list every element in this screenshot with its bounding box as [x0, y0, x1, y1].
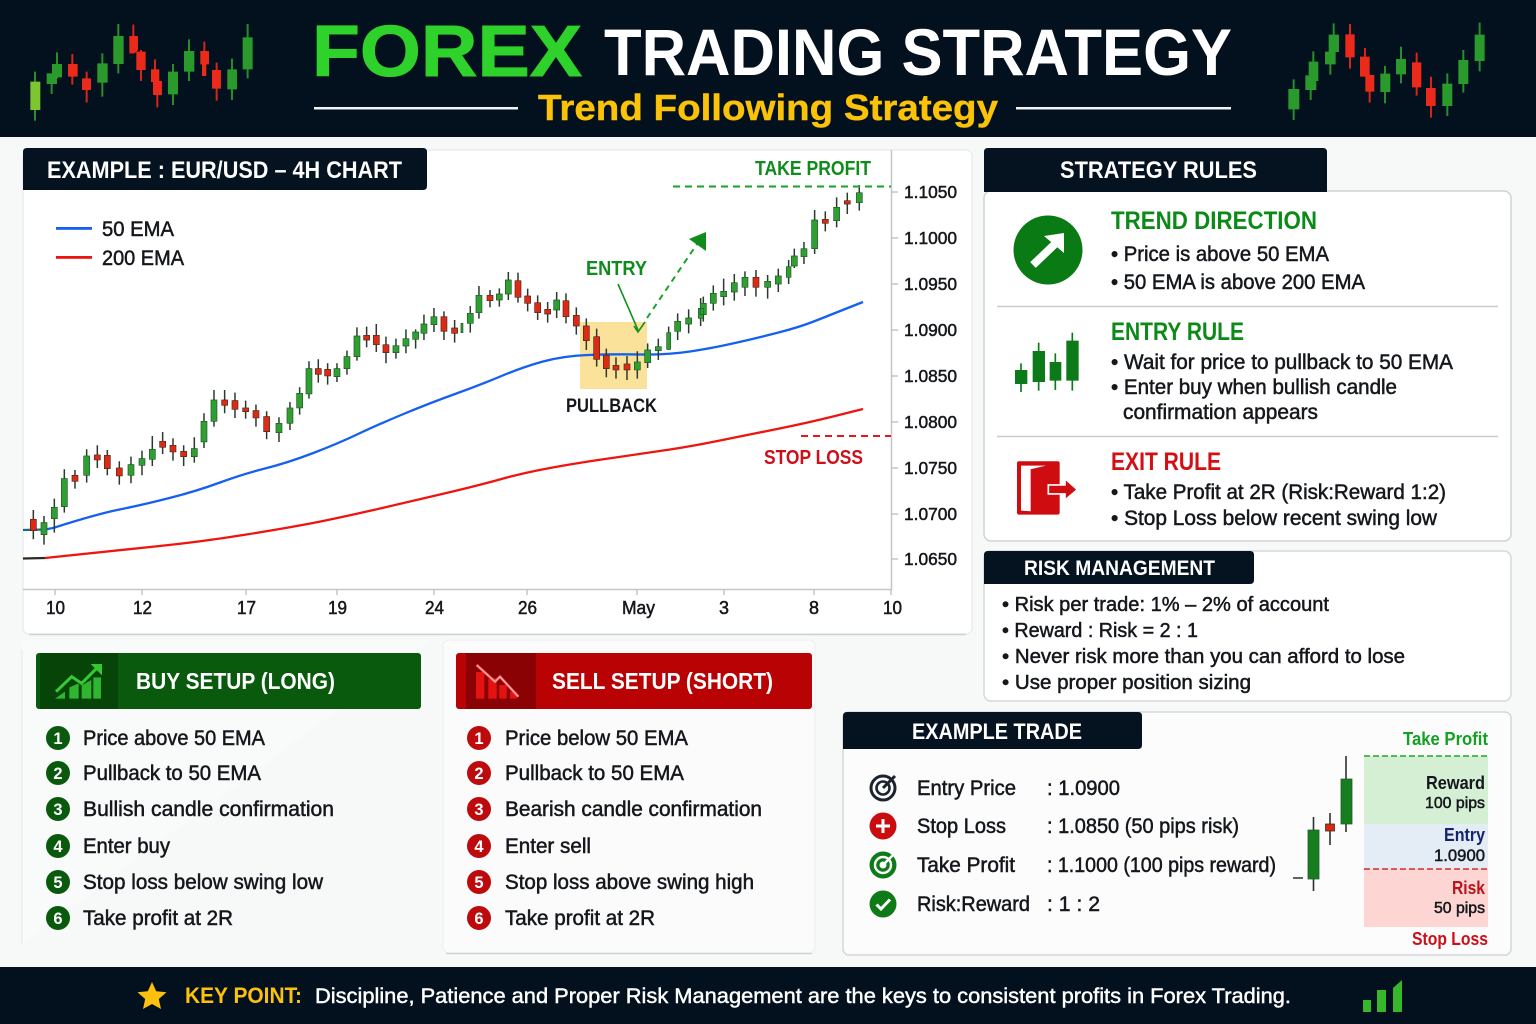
take profit level: TAKE PROFIT: [755, 158, 871, 180]
risk reward zones: Entry: [1444, 825, 1485, 845]
icon: exit door: [1017, 461, 1077, 515]
candlesticks: [30, 185, 862, 545]
mini candlesticks: [1293, 756, 1352, 891]
chart axes: 1.0850: [904, 366, 957, 386]
legend: 50 EMA: [102, 218, 174, 241]
stop loss row: [917, 815, 1239, 838]
chart axes: 3: [719, 598, 729, 618]
legend: 200 EMA: [102, 247, 184, 270]
panel: sell setup: [443, 640, 815, 954]
header banner: [0, 0, 1536, 137]
stop loss row: : 1.0850 (50 pips risk): [1047, 815, 1239, 838]
chart axes: 1.0950: [904, 274, 957, 294]
exit rule: EXIT RULE: [1111, 448, 1221, 476]
entry rule: confirmation appears: [1123, 401, 1318, 424]
icon: rising chart: [55, 664, 102, 699]
icon: trend arrow: [1014, 216, 1082, 284]
take profit row: [917, 854, 1276, 877]
example trade heading: [843, 712, 1142, 749]
sell list: Price below 50 EMA: [505, 727, 688, 750]
stop loss level: [764, 436, 891, 469]
title: [312, 12, 1232, 92]
icon: right header candlesticks: [1288, 23, 1485, 120]
risk list: • Risk per trade: 1% – 2% of account: [1002, 593, 1329, 616]
chart axes: 1.1050: [904, 182, 957, 202]
panel: buy setup: [22, 640, 430, 945]
panel: EUR/USD chart: [23, 148, 972, 634]
sell list: 4: [474, 838, 484, 856]
sell header: SELL SETUP (SHORT): [552, 668, 773, 694]
50 EMA line: [23, 302, 863, 530]
risk reward zones: Risk: [1452, 878, 1486, 898]
sell list: [467, 726, 762, 930]
risk reward zones: Stop Loss: [1412, 929, 1488, 949]
strategy rules heading: STRATEGY RULES: [1060, 157, 1257, 184]
chart heading: [23, 148, 427, 190]
exit rule: • Take Profit at 2R (Risk:Reward 1:2): [1111, 481, 1446, 504]
key point text: Discipline, Patience and Proper Risk Management are the keys to consistent profits in Forex Trading.: [315, 985, 1291, 1008]
risk reward zones: 1.0900: [1434, 846, 1485, 865]
buy list: 4: [53, 838, 63, 856]
title: FOREX: [312, 12, 582, 92]
icon: star: [138, 982, 166, 1009]
icon: target: [871, 776, 895, 800]
buy list: 2: [53, 765, 63, 783]
chart axes: 8: [809, 598, 819, 618]
icon: check: [870, 890, 896, 918]
icon: candles: [1015, 333, 1079, 392]
chart axes: 10: [883, 598, 902, 618]
entry rule: • Wait for price to pullback to 50 EMA: [1111, 351, 1453, 374]
sell list: Take profit at 2R: [505, 907, 655, 930]
buy list: Enter buy: [83, 835, 170, 858]
buy list: 5: [53, 874, 63, 892]
sell list: 1: [474, 730, 484, 748]
risk reward row: Risk:Reward: [917, 893, 1030, 916]
buy list: Price above 50 EMA: [83, 727, 265, 750]
entry price row: Entry Price: [917, 777, 1016, 800]
entry price row: : 1.0900: [1047, 777, 1120, 800]
risk list: [1002, 593, 1405, 694]
chart axes: 1.1000: [904, 228, 957, 248]
exit rule: • Stop Loss below recent swing low: [1111, 507, 1438, 530]
200 EMA line: [23, 409, 863, 558]
risk reward zones: [1364, 729, 1488, 949]
entry rule: [1111, 318, 1453, 424]
panel: strategy rules: [984, 148, 1511, 541]
chart axes: May: [622, 598, 655, 618]
sell list: 3: [474, 801, 484, 819]
example trade heading: EXAMPLE TRADE: [912, 719, 1082, 744]
pullback label: PULLBACK: [566, 396, 657, 417]
take profit row: : 1.1000 (100 pips reward): [1047, 854, 1276, 877]
risk reward row: : 1 : 2: [1047, 893, 1100, 916]
key point text: KEY POINT:: [185, 983, 302, 1008]
sell header: [456, 653, 812, 709]
risk management heading: [984, 551, 1254, 584]
risk reward zones: Reward: [1426, 773, 1485, 793]
risk management heading: RISK MANAGEMENT: [1024, 557, 1215, 580]
buy list: Stop loss below swing low: [83, 871, 324, 894]
strategy rules heading: [984, 148, 1327, 192]
risk list: • Never risk more than you can afford to lose: [1002, 645, 1405, 668]
risk reward zones: 50 pips: [1434, 900, 1485, 917]
chart axes: 1.0750: [904, 458, 957, 478]
sell list: 6: [474, 910, 484, 928]
panel: risk management: [984, 551, 1511, 701]
chart axes: 17: [237, 598, 256, 618]
sell list: Bearish candle confirmation: [505, 798, 762, 821]
chart axes: 1.0900: [904, 320, 957, 340]
chart axes: 1.0800: [904, 412, 957, 432]
chart axes: 1.0650: [904, 549, 957, 569]
entry annotation: [586, 232, 706, 332]
entry price row: [917, 777, 1120, 800]
buy header: BUY SETUP (LONG): [136, 668, 335, 694]
stop loss level: STOP LOSS: [764, 447, 863, 469]
trend direction rule: • 50 EMA is above 200 EMA: [1111, 271, 1365, 294]
risk list: • Use proper position sizing: [1002, 671, 1251, 694]
risk reward row: [917, 893, 1100, 916]
trend direction rule: TREND DIRECTION: [1111, 207, 1317, 235]
risk reward zones: Take Profit: [1403, 729, 1488, 749]
legend: [56, 218, 184, 270]
icon: footer bars: [1363, 980, 1402, 1012]
icon: left header candlesticks: [30, 24, 253, 121]
stop loss row: Stop Loss: [917, 815, 1006, 838]
sell list: Enter sell: [505, 835, 591, 858]
entry rule: • Enter buy when bullish candle: [1111, 376, 1397, 399]
risk reward zones: 100 pips: [1425, 795, 1485, 812]
chart axes: 26: [518, 598, 537, 618]
entry rule: ENTRY RULE: [1111, 318, 1244, 346]
chart axes: 1.0700: [904, 504, 957, 524]
panel: example trade: [843, 712, 1511, 955]
icon: stop: [870, 812, 896, 840]
risk list: • Reward : Risk = 2 : 1: [1002, 619, 1198, 642]
title: TRADING STRATEGY: [604, 15, 1232, 89]
chart axes: 10: [46, 598, 65, 618]
take profit row: Take Profit: [917, 854, 1015, 877]
chart heading: EXAMPLE : EUR/USD – 4H CHART: [47, 157, 402, 184]
buy list: Take profit at 2R: [83, 907, 233, 930]
exit rule: [1111, 448, 1446, 530]
buy list: [46, 726, 334, 930]
icon: green target: [870, 852, 896, 878]
buy header: [36, 653, 421, 709]
buy list: 1: [53, 730, 63, 748]
buy list: Pullback to 50 EMA: [83, 762, 261, 785]
footer banner: [0, 967, 1536, 1024]
subtitle: Trend Following Strategy: [538, 87, 998, 128]
trend direction rule: • Price is above 50 EMA: [1111, 243, 1329, 266]
chart axes: 19: [328, 598, 347, 618]
buy list: 6: [53, 910, 63, 928]
icon: falling chart: [476, 665, 518, 699]
buy list: 3: [53, 801, 63, 819]
buy list: Bullish candle confirmation: [83, 798, 334, 821]
chart axes: 24: [425, 598, 444, 618]
sell list: 2: [474, 765, 484, 783]
chart axes: 12: [133, 598, 152, 618]
sell list: 5: [474, 874, 484, 892]
trend direction rule: [1111, 207, 1365, 294]
sell list: Pullback to 50 EMA: [505, 762, 684, 785]
pullback highlight: [580, 322, 647, 389]
chart axes: [23, 150, 957, 618]
entry annotation: ENTRY: [586, 258, 648, 280]
sell list: Stop loss above swing high: [505, 871, 754, 894]
